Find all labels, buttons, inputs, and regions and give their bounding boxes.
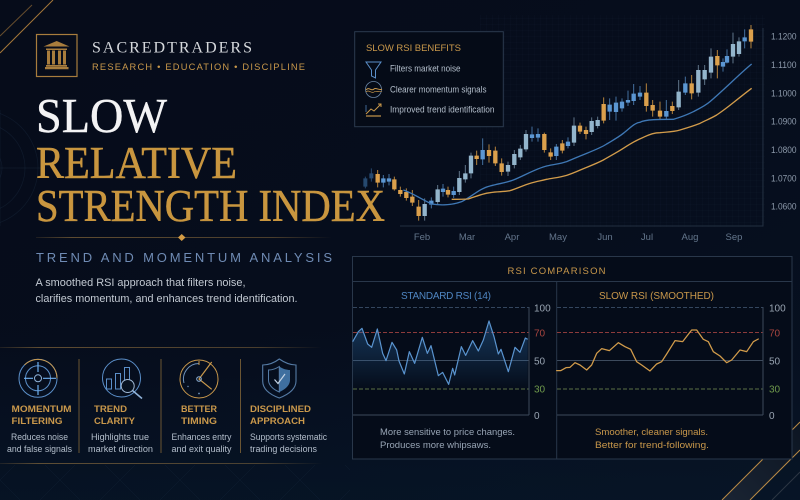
month axis labels: May [549, 232, 567, 243]
feature: disciplined approach: Supports systematic [250, 432, 327, 442]
title: SLOW [36, 88, 168, 143]
axis labels: 50 [769, 356, 781, 368]
month axis labels: Aug [682, 232, 698, 243]
axis labels [534, 304, 551, 422]
month axis labels: Apr [505, 232, 519, 243]
axis labels: 30 [534, 384, 546, 396]
price axis labels: 1.0700 [771, 174, 796, 184]
price axis labels: 1.0800 [771, 145, 796, 156]
slow RSI line [557, 330, 758, 371]
benefit: clearer momentum signals: Clearer momentum signals [390, 84, 487, 94]
price axis labels [771, 32, 796, 212]
brand tagline: RESEARCH • EDUCATION • DISCIPLINE [92, 62, 305, 72]
icon: trend arrow [366, 104, 381, 116]
feature: disciplined approach: trading decisions [250, 444, 317, 454]
title: RELATIVE [36, 138, 237, 188]
description: A smoothed RSI approach that filters noise, [36, 277, 246, 289]
feature: better timing: BETTER [181, 404, 217, 415]
month axis labels: Jun [597, 232, 613, 243]
features strip [0, 347, 327, 464]
axis labels: 100 [769, 304, 786, 314]
icon: funnel [366, 62, 381, 78]
icon: momentum waves [366, 82, 382, 98]
title: STRENGTH INDEX [36, 181, 385, 231]
feature: trend clarity: TREND [94, 404, 127, 415]
icon: target [19, 359, 57, 397]
feature: disciplined approach [250, 359, 327, 454]
axis labels: 70 [769, 328, 781, 340]
price axis labels: 1.1000 [771, 88, 796, 100]
feature: momentum filtering: Reduces noise [11, 432, 68, 442]
price axis labels: 1.0900 [771, 116, 796, 128]
panel: slow RSI [557, 291, 786, 451]
panel: RSI comparison: RSI COMPARISON [508, 266, 606, 277]
panel: slow RSI: Better for trend-following. [595, 440, 709, 451]
feature: disciplined approach: APPROACH [250, 416, 305, 427]
feature: better timing: TIMING [181, 416, 217, 427]
panel: slow RSI benefits: SLOW RSI BENEFITS [366, 43, 461, 54]
feature: momentum filtering: and false signals [7, 444, 72, 454]
corner lines: bottom-right [722, 422, 800, 500]
panel: slow RSI: Smoother, cleaner signals. [595, 427, 708, 438]
icon: clock [180, 360, 218, 398]
corner lines: top-left [0, 0, 53, 53]
panel: standard RSI [353, 291, 551, 451]
price axis labels: 1.1100 [771, 60, 796, 71]
benefit: improved trend identification: Improved trend identification [390, 104, 494, 114]
feature: trend clarity: market direction [88, 444, 153, 454]
feature: momentum filtering: FILTERING [12, 416, 63, 427]
price axis labels: 1.1200 [771, 32, 796, 42]
moving average: blue [403, 64, 752, 205]
panel: standard RSI: Produces more whipsaws. [380, 440, 491, 451]
feature: disciplined approach: DISCIPLINED [250, 404, 311, 415]
feature: momentum filtering: MOMENTUM [12, 404, 72, 415]
chart grid [557, 307, 763, 415]
axis labels: 0 [769, 411, 775, 422]
title [36, 88, 385, 231]
feature: trend clarity: Highlights true [91, 432, 149, 442]
price chart [365, 25, 796, 243]
standard RSI line [353, 321, 528, 390]
panel: slow RSI benefits [355, 32, 503, 127]
feature: better timing: Enhances entry [172, 432, 232, 442]
axis labels: 50 [534, 356, 546, 368]
axis labels: 30 [769, 384, 781, 396]
month axis labels: Sep [726, 232, 742, 243]
feature: better timing [172, 360, 232, 454]
subtitle: TREND AND MOMENTUM ANALYSIS [36, 250, 332, 265]
panel: RSI comparison [352, 256, 792, 459]
panel: standard RSI: More sensitive to price changes. [380, 427, 515, 438]
price axis labels: 1.0600 [771, 202, 796, 212]
feature: trend clarity [88, 359, 153, 454]
icon: shield [263, 359, 296, 398]
month axis labels: Feb [414, 232, 430, 243]
icon: bars and magnifier [102, 359, 142, 398]
month axis labels: Jul [641, 232, 653, 243]
feature: better timing: and exit quality [172, 444, 232, 454]
month axis labels: Mar [459, 232, 475, 243]
brand name: SACREDTRADERS [92, 40, 252, 56]
candlesticks [365, 25, 751, 221]
axis labels: 70 [534, 328, 546, 340]
benefit: filters market noise: Filters market noise [390, 64, 460, 74]
logo emblem [36, 34, 77, 76]
month axis labels [414, 232, 742, 243]
axis labels: 100 [534, 304, 551, 314]
title divider [36, 234, 332, 241]
description: clarifies momentum, and enhances trend identification. [36, 293, 298, 305]
chart grid [353, 307, 529, 415]
feature: momentum filtering [7, 359, 72, 454]
feature: trend clarity: CLARITY [94, 416, 136, 427]
chart axes [400, 28, 763, 226]
axis labels [769, 304, 786, 422]
description [36, 277, 298, 305]
moving average: gold [452, 88, 752, 199]
panel: slow RSI: SLOW RSI (SMOOTHED) [599, 291, 714, 302]
panel: standard RSI: STANDARD RSI (14) [401, 291, 491, 302]
axis labels: 0 [534, 411, 540, 422]
